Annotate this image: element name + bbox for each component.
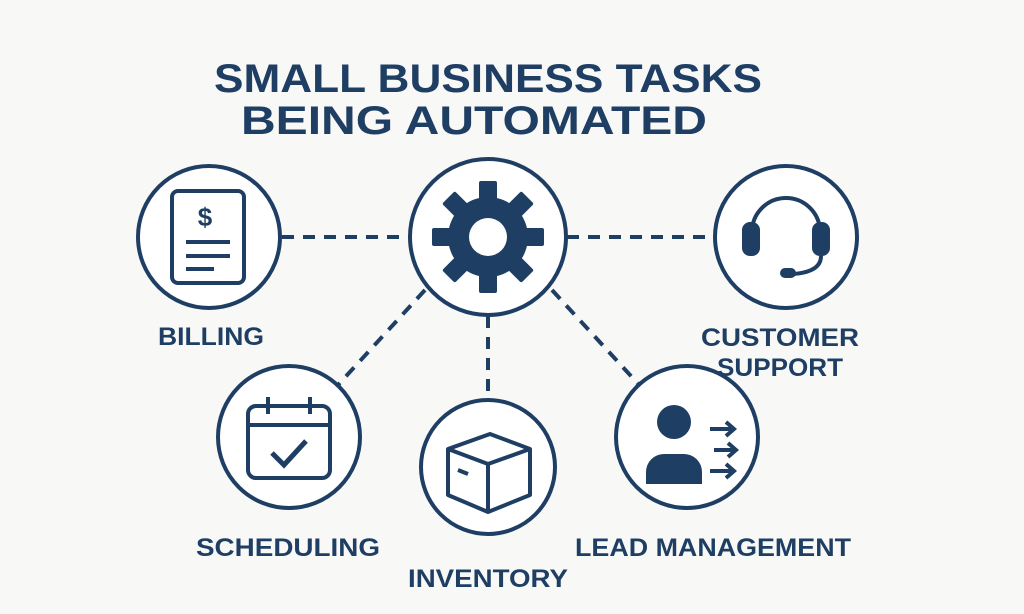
node: lead management bbox=[616, 366, 758, 508]
node: inventory bbox=[421, 400, 555, 534]
icon: headset bbox=[742, 198, 830, 278]
node: billing: $ bbox=[198, 202, 213, 232]
label: customer support: CUSTOMER bbox=[701, 324, 859, 352]
dashed connectors bbox=[282, 237, 713, 405]
title bbox=[214, 57, 762, 143]
label: lead management: LEAD MANAGEMENT bbox=[575, 534, 851, 562]
label: billing: BILLING bbox=[158, 323, 264, 351]
title: BEING AUTOMATED bbox=[241, 99, 707, 143]
icon: invoice bbox=[172, 191, 244, 283]
icon: calendar bbox=[248, 397, 330, 478]
label: inventory: INVENTORY bbox=[408, 565, 568, 593]
node: billing bbox=[138, 166, 280, 308]
label: scheduling: SCHEDULING bbox=[196, 534, 380, 562]
icon: gear bbox=[432, 181, 544, 293]
node: customer support bbox=[715, 166, 857, 308]
node: automation gear bbox=[410, 159, 566, 315]
node: scheduling bbox=[218, 366, 360, 508]
icon: person with arrows bbox=[646, 405, 736, 484]
label: customer support: SUPPORT bbox=[717, 354, 843, 382]
icon: box bbox=[448, 434, 530, 512]
title: SMALL BUSINESS TASKS bbox=[214, 57, 762, 101]
